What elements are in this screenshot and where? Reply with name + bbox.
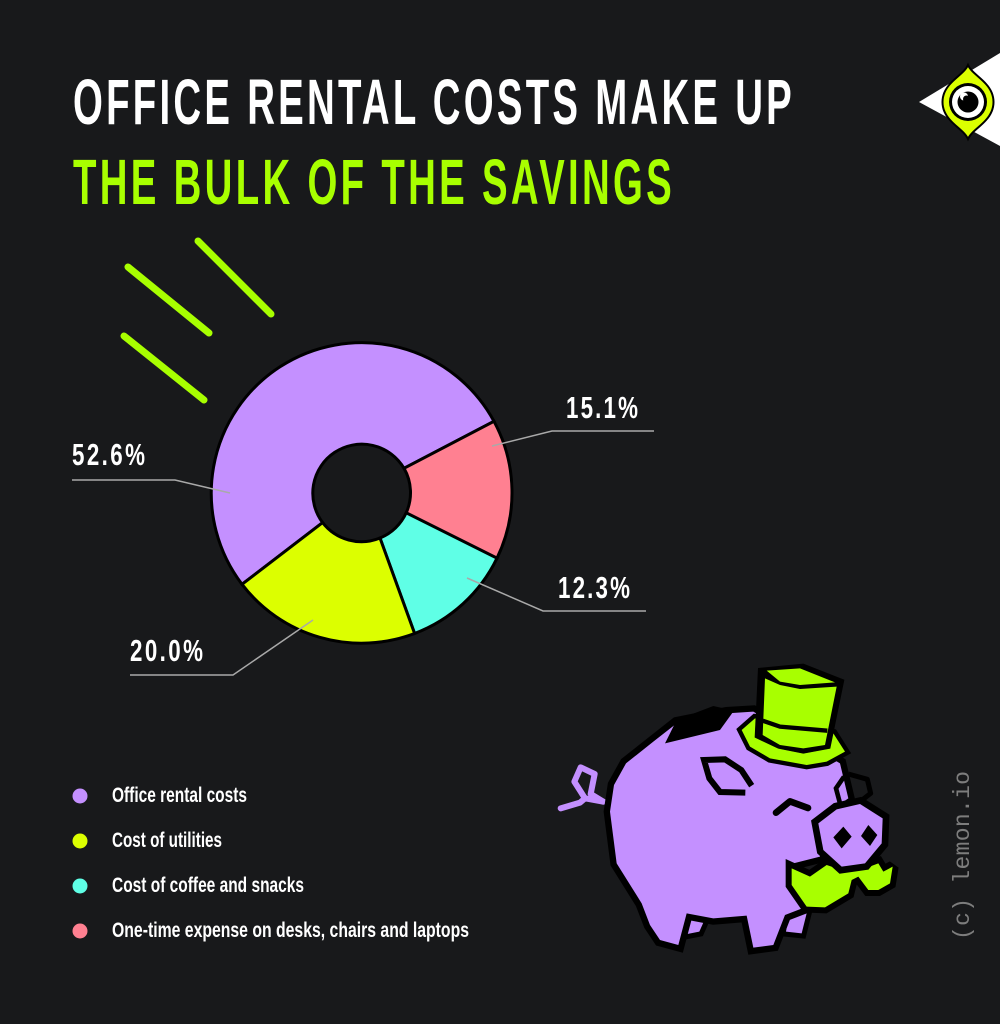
donut chart	[211, 343, 512, 643]
pig body	[610, 712, 848, 948]
slice: coffee and snacks 12.3%	[380, 513, 497, 634]
pig tail	[561, 767, 603, 808]
title	[73, 67, 792, 219]
pig back patch	[665, 706, 734, 743]
pig ear	[848, 774, 871, 802]
legend item: one-time expense	[72, 919, 469, 942]
pig closed eye	[704, 759, 752, 793]
legend item: coffee and snacks: Cost of coffee and snacks	[112, 874, 304, 897]
pig moustache	[792, 863, 893, 907]
hat band	[763, 721, 827, 731]
pig snout	[818, 804, 883, 867]
pig far legs	[687, 913, 807, 934]
credit text: (c) lemon.io	[950, 771, 976, 940]
pig inner ear	[836, 777, 844, 803]
legend item: one-time expense: One-time expense on desks, chairs and laptops	[112, 919, 469, 942]
legend item: utilities	[72, 829, 222, 852]
pig nostrils	[833, 827, 852, 848]
callout values: 52.6%	[72, 437, 145, 472]
hat brim	[742, 718, 845, 765]
callout values: 20.0%	[130, 633, 203, 668]
callout values	[72, 390, 638, 668]
slice: one-time expense 15.1%	[404, 421, 512, 558]
hat crown outline	[755, 664, 844, 753]
icon: motion lines	[124, 241, 271, 400]
legend item: coffee and snacks	[72, 874, 304, 897]
hat crown face	[763, 678, 837, 748]
slice: office rental costs 52.6%	[211, 343, 494, 584]
legend item: office rental costs: Office rental costs	[112, 784, 247, 807]
legend item: utilities: Cost of utilities	[112, 829, 222, 852]
callout values: 12.3%	[558, 570, 630, 605]
illustration: piggy bank	[561, 664, 893, 948]
legend	[72, 784, 469, 942]
title: OFFICE RENTAL COSTS MAKE UP	[73, 67, 792, 139]
icon: lemon eye logo	[919, 53, 1000, 146]
slice: utilities 20.0%	[242, 523, 415, 643]
hat top	[767, 668, 835, 685]
callout leader lines	[72, 431, 654, 675]
pig brow	[776, 801, 808, 813]
callout values: 15.1%	[566, 390, 638, 425]
legend item: office rental costs	[72, 784, 247, 807]
title: THE BULK OF THE SAVINGS	[73, 147, 672, 219]
